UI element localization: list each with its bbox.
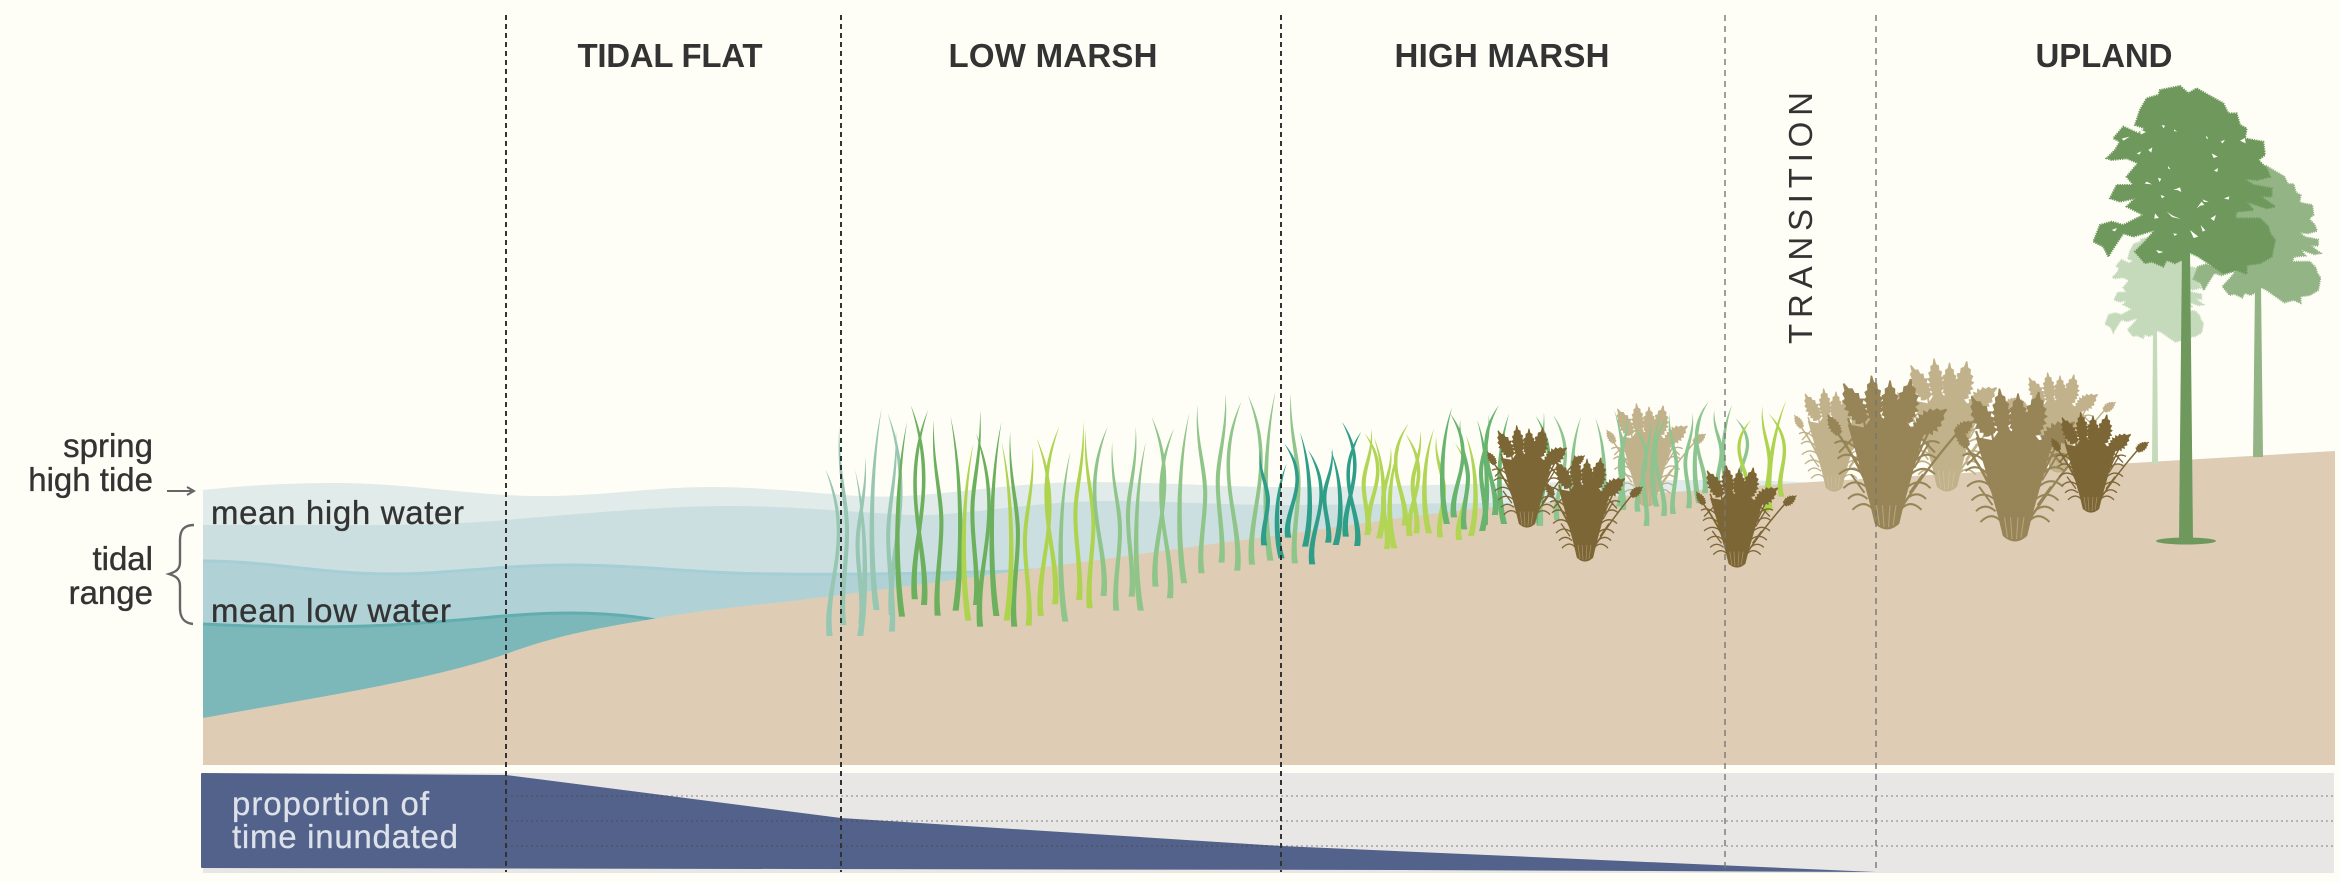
blades: soft green [1535, 402, 1749, 526]
blades: green [895, 405, 1020, 627]
label: spring high tide: high tide [28, 461, 153, 498]
heading: low marsh: LOW MARSH [948, 37, 1158, 74]
blades: lime near transition [1737, 400, 1792, 512]
light background shrubs [1603, 358, 2118, 506]
low marsh cordgrass blades [826, 392, 1551, 636]
sediment ground [203, 451, 2335, 765]
heading: tidal flat: TIDAL FLAT [578, 37, 762, 74]
label: spring high tide: spring [63, 427, 153, 464]
water layers [203, 480, 1815, 730]
blades: lime high marsh [1362, 423, 1478, 549]
label: tidal range: range [69, 574, 153, 611]
tree: pale far tree [2105, 237, 2203, 464]
arrow: spring high tide [167, 487, 194, 495]
proportion of time inundated chart [201, 773, 2334, 873]
water: tidal range band [203, 560, 1060, 730]
blades: pale green [1058, 392, 1301, 622]
chart background [203, 773, 2334, 873]
high marsh blades near transition [1535, 400, 1792, 526]
label: proportion of time inundated: time inundated [232, 818, 458, 855]
brown shrubs: mid tone [1823, 375, 2105, 541]
blades: mid green high marsh [1440, 405, 1551, 531]
tree: main foreground tree [2093, 86, 2275, 544]
heading: high marsh: HIGH MARSH [1394, 37, 1610, 74]
water: spring high tide [203, 480, 1815, 730]
inundation wedge [201, 773, 1876, 872]
background trees [2105, 164, 2320, 464]
zone boundary lines [506, 15, 1876, 872]
brace: tidal range [169, 525, 194, 624]
heading: upland: UPLAND [2036, 37, 2172, 74]
label: proportion of time inundated [232, 785, 458, 855]
brown shrubs: dark foreground [1484, 412, 2151, 567]
heading: transition: TRANSITION [1782, 92, 1819, 344]
blades: dark teal [1259, 422, 1361, 564]
water: mean high water [203, 501, 1510, 730]
label: proportion of time inundated: proportion of [232, 785, 430, 822]
label: mean low water: mean low water [211, 592, 451, 629]
blades: lime [961, 422, 1096, 626]
label: mean high water: mean high water [211, 494, 464, 531]
blades: pale teal [826, 408, 903, 636]
tree: mid tree [2193, 164, 2320, 457]
label: tidal range: tidal [92, 540, 153, 577]
water: below mean low water [203, 612, 662, 730]
